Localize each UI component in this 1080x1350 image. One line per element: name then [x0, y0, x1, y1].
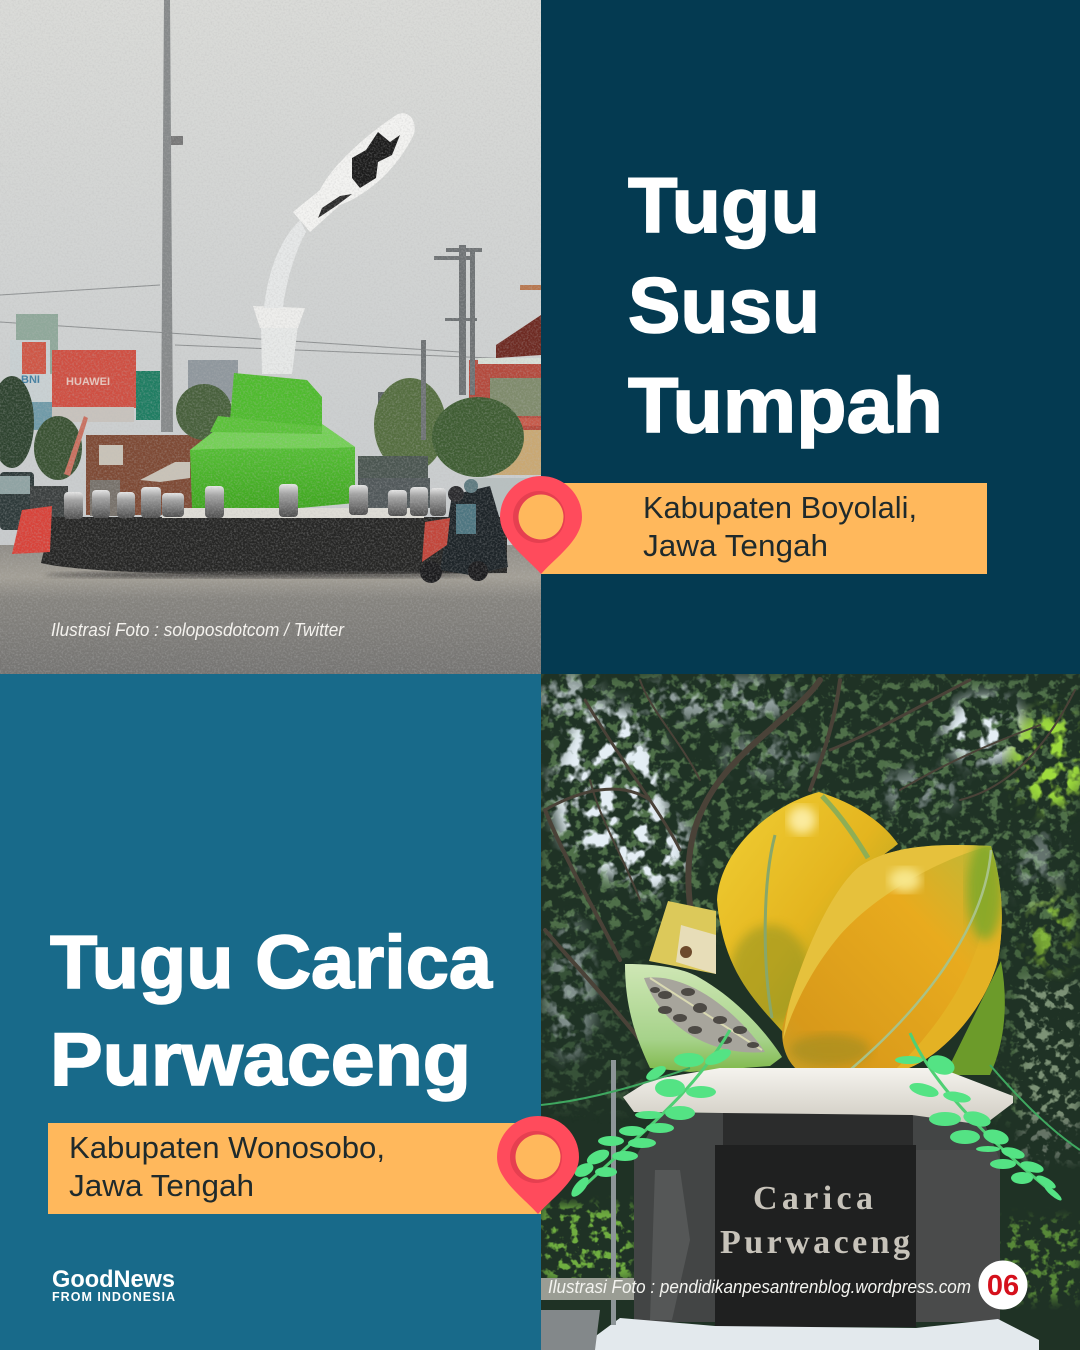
panel: blue title panel [0, 674, 541, 1350]
title: Tugu Susu Tumpah [628, 161, 943, 449]
bright foliage top right [1010, 710, 1080, 970]
red road barrier [12, 506, 52, 554]
location banner: Wonosobo: Jawa Tengah [69, 1168, 254, 1203]
location banner: Boyolali: Kabupaten Boyolali, [643, 490, 917, 525]
page number badge [978, 1260, 1028, 1310]
background buildings and billboards: HUAWEI [66, 376, 110, 388]
road [0, 545, 541, 674]
milk bottle [293, 113, 415, 232]
pedestal column [634, 1113, 1000, 1327]
film grain [0, 0, 541, 674]
pedestal white base [593, 1318, 1039, 1350]
tree branches [545, 680, 1075, 1040]
logo: GoodNews from Indonesia: FROM INDONESIA [52, 1290, 175, 1304]
title: Tugu Carica Purwaceng [50, 920, 493, 1101]
pale leaves right [1020, 980, 1080, 1160]
mid-green foliage [541, 674, 1080, 1120]
panel: dark navy title panel [541, 0, 1080, 674]
road [541, 1310, 600, 1350]
carica fruit, back [717, 792, 898, 1040]
title: Tugu Susu Tumpah: Tugu [628, 161, 820, 249]
background buildings and billboards [10, 285, 541, 516]
pedestal carved letters: Purwaceng [720, 1224, 910, 1261]
roundabout base [41, 508, 507, 578]
icon: map pin, top [500, 476, 582, 574]
overhead wires [0, 285, 540, 360]
location banner: Boyolali: Jawa Tengah [643, 528, 828, 563]
cars on the road [0, 472, 541, 530]
location banner: Wonosobo [48, 1123, 541, 1214]
carica fruit, halved with seeds [625, 964, 782, 1072]
logo: GoodNews from Indonesia: GoodNews [52, 1266, 175, 1293]
title: Tugu Carica Purwaceng: Tugu Carica [50, 920, 493, 1004]
location banner: Boyolali [541, 483, 987, 574]
green vine, right [895, 1033, 1080, 1202]
sky through leaves [540, 674, 1064, 1060]
carica fruit, front [782, 840, 1005, 1075]
pedestal carved letters [720, 1180, 910, 1261]
motorcycle with riders [420, 479, 508, 583]
milk pouring column [253, 220, 306, 374]
carica fruit slice, yellow square [649, 901, 716, 974]
location banner: Wonosobo: Kabupaten Wonosobo, [69, 1130, 385, 1165]
pedestal white rim [623, 1068, 1013, 1125]
photo credit: Tugu Susu: Ilustrasi Foto : soloposdotcom / Twitter [51, 620, 345, 640]
bright foliage lower left [541, 1205, 1080, 1300]
low wall left [541, 1278, 634, 1300]
photo: Tugu Susu Tumpah roundabout [0, 0, 541, 674]
background buildings and billboards: BNI [21, 374, 40, 386]
milk tugu green cake [190, 373, 355, 508]
green vine, left [541, 1030, 733, 1199]
red banner pole [64, 416, 88, 476]
lamp post [611, 1060, 616, 1325]
title: Tugu Carica Purwaceng: Purwaceng [50, 1017, 471, 1101]
title: Tugu Susu Tumpah: Susu [628, 261, 820, 349]
page number badge: 06 [987, 1270, 1019, 1302]
background trees [0, 376, 524, 488]
icon: utility pole [421, 245, 482, 440]
icon: map pin, bottom [497, 1116, 579, 1214]
title: Tugu Susu Tumpah: Tumpah [628, 361, 943, 449]
photo credit: Tugu Carica: Ilustrasi Foto : pendidikanpesantrenblog.wordpress.com [548, 1277, 971, 1297]
carica fruit behind, green [952, 961, 1005, 1075]
milk cans [64, 484, 446, 519]
pedestal carved letters: Carica [753, 1180, 873, 1217]
photo: Tugu Carica Purwaceng [540, 674, 1080, 1350]
icon: light pole [161, 0, 173, 432]
